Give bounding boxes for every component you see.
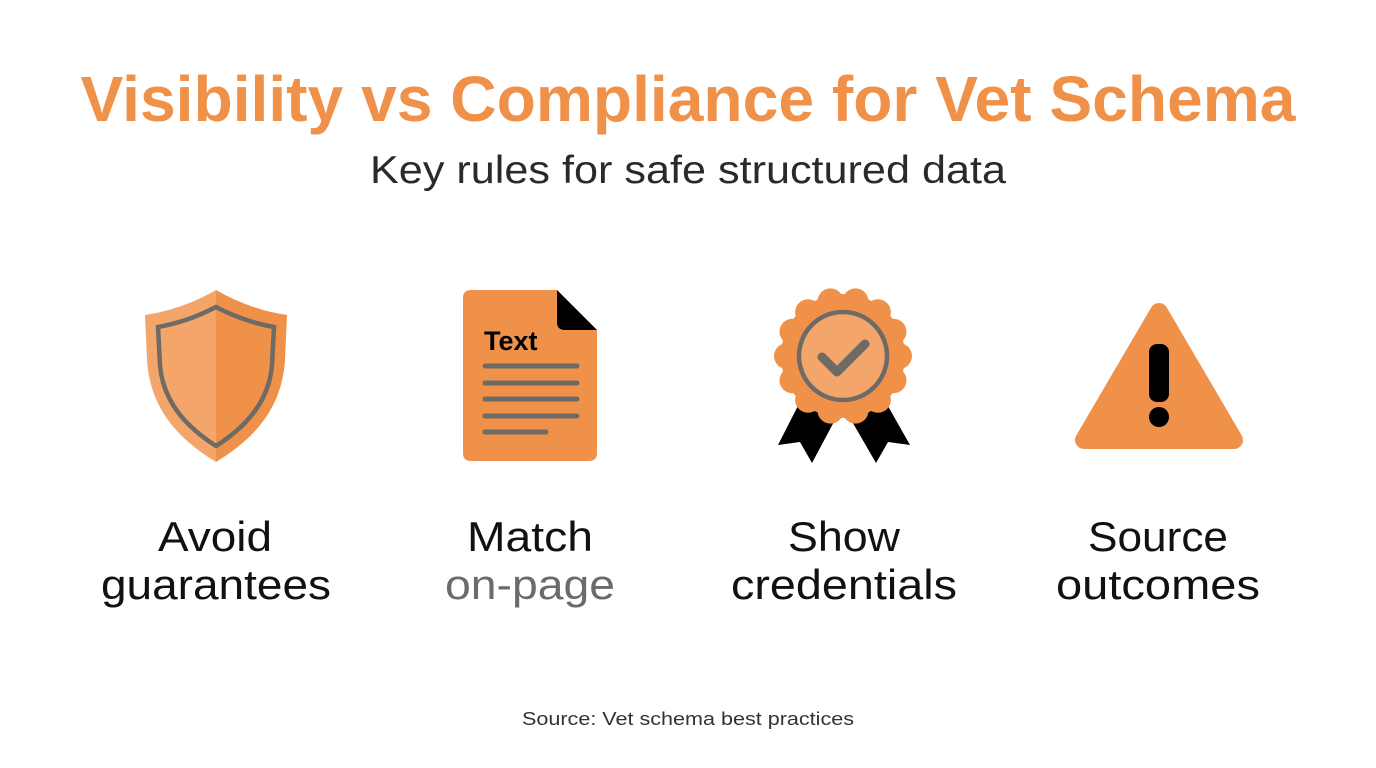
label: source outcomes — [1056, 513, 1260, 608]
icon: warning triangle — [1084, 312, 1234, 440]
label: avoid guarantees: guarantees — [101, 561, 331, 608]
icon: shield — [145, 290, 287, 462]
label: match on-page: on-page — [445, 561, 615, 608]
label: avoid guarantees — [101, 513, 331, 608]
title: Visibility vs Compliance for Vet Schema — [80, 63, 1296, 135]
label: match on-page — [445, 513, 615, 608]
source note: Source: Vet schema best practices — [522, 709, 854, 729]
label: source outcomes: outcomes — [1056, 561, 1260, 608]
label: source outcomes: Source — [1088, 513, 1228, 560]
label: show credentials: credentials — [731, 561, 957, 608]
label: show credentials: Show — [788, 513, 901, 560]
label: avoid guarantees: Avoid — [158, 513, 272, 560]
icon: text document: Text — [484, 326, 538, 356]
label: show credentials — [731, 513, 957, 608]
icon: award badge — [774, 288, 912, 463]
label: match on-page: Match — [467, 513, 593, 560]
subtitle: Key rules for safe structured data — [370, 149, 1006, 192]
icon: text document — [463, 290, 597, 461]
